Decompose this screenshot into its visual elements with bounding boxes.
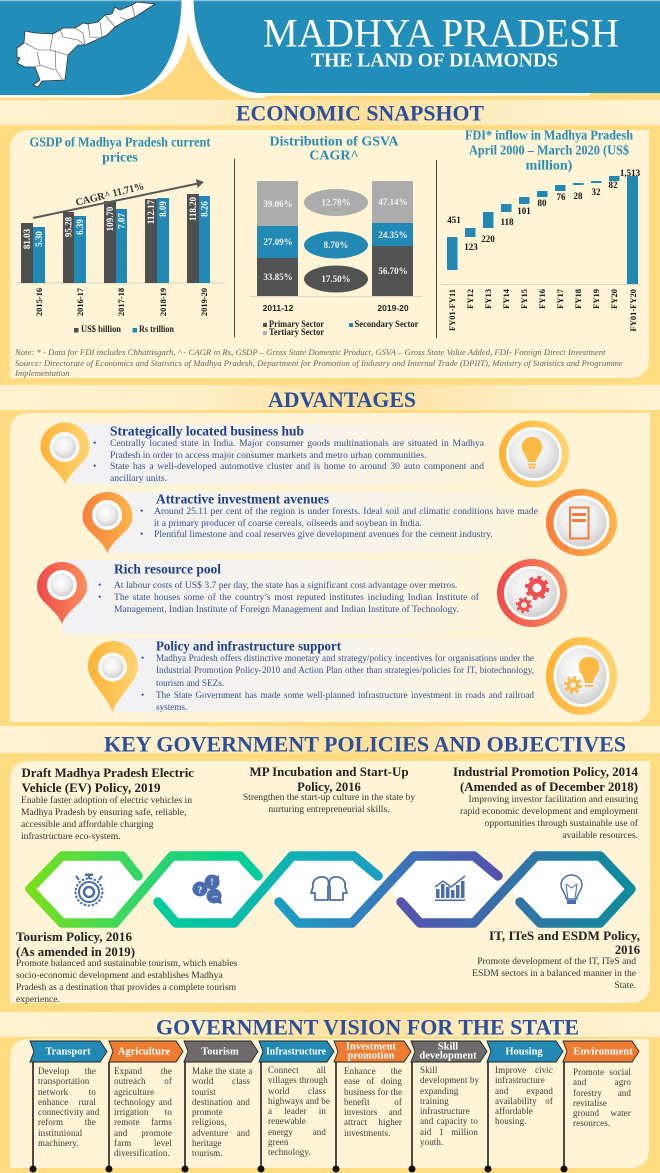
text block: environment: Promote social bbox=[573, 1067, 631, 1077]
heading: Attractive investment avenues bbox=[156, 492, 329, 506]
text block: housing: housing. bbox=[495, 1116, 527, 1126]
chart: FDI waterfall: 28 bbox=[574, 191, 583, 201]
section band: key government policies: KEY GOVERNMENT POLICIES AND OBJECTIVES bbox=[104, 732, 626, 756]
policy heading: industrial promotion: (Amended as of December 2018) bbox=[460, 780, 638, 794]
chart: GSVA distribution: 39.06% bbox=[263, 199, 293, 209]
chart title: million) bbox=[526, 158, 573, 174]
chart: GSVA distribution: 33.85% bbox=[263, 272, 293, 282]
panel: economic snapshot bbox=[10, 128, 649, 378]
icon: pin bbox=[82, 492, 133, 553]
policy heading: draft EV: Vehicle (EV) Policy, 2019 bbox=[22, 781, 160, 795]
text block: investment avenues bullets: Around 25.11 per cent of the region is under forests. Ideal soil and climatic conditions have made bbox=[154, 506, 538, 517]
text block: skill development: youth. bbox=[420, 1137, 443, 1147]
chart title bbox=[30, 136, 211, 166]
chart: GSDP bars: 109.70 bbox=[105, 206, 115, 231]
text block: agriculture: technology and bbox=[114, 1097, 172, 1107]
chart: GSDP bars: 2019-20 bbox=[199, 288, 209, 316]
text block: agriculture: farm level bbox=[114, 1138, 172, 1148]
text block: agriculture: agriculture bbox=[114, 1087, 154, 1097]
policy heading: tourism bbox=[16, 930, 135, 959]
text block: environment bbox=[573, 1067, 631, 1128]
text block: transport: Develop the bbox=[38, 1066, 96, 1076]
text block: transport: machinery. bbox=[38, 1138, 79, 1148]
chart: FDI waterfall: FY12 bbox=[465, 289, 475, 309]
policy heading: incubation: Policy, 2016 bbox=[297, 780, 361, 794]
note and source text: Implementation bbox=[15, 368, 70, 378]
text: • bbox=[140, 529, 143, 540]
arrow: CAGR trend bbox=[33, 179, 204, 218]
chart: FDI waterfall: FY16 bbox=[537, 289, 547, 309]
hexagon chain bbox=[30, 856, 631, 923]
text block: industrial promotion policy: opportunities through sustainable use of bbox=[485, 818, 638, 829]
note and source text bbox=[15, 347, 623, 378]
policy heading: industrial promotion bbox=[453, 765, 639, 794]
chart: FDI waterfall bbox=[442, 128, 641, 332]
chart: GSVA distribution: 56.70% bbox=[378, 266, 408, 276]
text block: agriculture: and promote bbox=[114, 1128, 172, 1138]
policy heading: IT: 2016 bbox=[615, 943, 640, 957]
text block: resource pool bullets bbox=[98, 580, 479, 615]
section band: government vision bbox=[0, 1012, 660, 1040]
icon: speech bubbles: ? bbox=[198, 885, 202, 895]
text block: investment avenues bullets: Plentiful limestone and coal reserves give development avenues for the cement industry. bbox=[154, 529, 493, 540]
icon: light bulb bbox=[561, 875, 582, 904]
chart: FDI waterfall: FY17 bbox=[555, 288, 565, 309]
text block: infrastructure: technology. bbox=[268, 1147, 311, 1157]
heading: Rich resource pool bbox=[114, 562, 221, 576]
chart: FDI waterfall: 82 bbox=[608, 180, 618, 190]
chart: GSDP bars: 5.30 bbox=[34, 231, 44, 247]
policy heading: IT bbox=[489, 929, 640, 957]
text block: transport: network to bbox=[38, 1087, 96, 1097]
policy heading: tourism: Tourism Policy, 2016 bbox=[16, 930, 132, 944]
text block: investment promotion bbox=[344, 1066, 402, 1138]
text block: tourism policy: socio-economic development and establishes Madhya bbox=[16, 970, 223, 981]
text block: environment: ground water bbox=[573, 1108, 631, 1118]
note and source text: Source: Directorate of Economics and Statistics of Madhya Pradesh, Department for Promotion of Industry and Internal Trade (DPIIT), Ministry of Statistics and Programme bbox=[15, 358, 623, 368]
text block: business hub bullets: ancillary units. bbox=[110, 473, 167, 484]
chart: FDI waterfall: 32 bbox=[592, 187, 601, 197]
text block: resource pool bullets: The state houses some of the country’s most reputed institutes including Indian Institute of bbox=[114, 592, 479, 603]
chart: FDI waterfall: FY14 bbox=[501, 288, 511, 309]
text block: transport: connectivity and bbox=[38, 1107, 99, 1117]
text block: skill development: aid 1 million bbox=[420, 1127, 478, 1137]
icon: growth chart bbox=[435, 876, 465, 901]
chart: GSVA distribution: 17.50% bbox=[321, 274, 351, 284]
chart: FDI waterfall: FY20 bbox=[609, 289, 619, 309]
text block: housing: infrastructure bbox=[495, 1075, 545, 1085]
chart title: Distribution of GSVA bbox=[270, 134, 399, 150]
text: • bbox=[93, 461, 96, 472]
text block: EV policy: Madhya Pradesh by ensuring safe, reliable, bbox=[21, 807, 186, 818]
text block: business hub bullets: Pradesh in order to access major consumer markets and metro urban communities. bbox=[110, 450, 427, 461]
chart: GSDP bars: 95.28 bbox=[64, 216, 74, 237]
chart: FDI waterfall: 76 bbox=[556, 192, 566, 202]
row: policy and infrastructure support bbox=[88, 637, 617, 715]
text block: policy support bullets: systems. bbox=[156, 702, 187, 712]
text block: policy support bullets: Industrial Promotion Policy-2010 and Action Plan other than strategies/policies for IT, biotechnology, bbox=[156, 665, 534, 675]
text block: policy support bullets: The State Government has made some well-planned infrastructure investment in roads and railroad bbox=[156, 690, 534, 700]
chart: GSDP bars bbox=[15, 136, 225, 335]
chart title bbox=[270, 134, 399, 164]
chart: GSVA distribution: 12.78% bbox=[321, 198, 351, 208]
text: • bbox=[141, 690, 144, 700]
icon: pin bbox=[40, 422, 90, 484]
text block: environment: forestry and bbox=[573, 1088, 631, 1098]
panel: header right blue bbox=[194, 0, 660, 93]
chart: GSDP bars: 8.09 bbox=[158, 201, 168, 217]
row: rich resource pool bbox=[37, 559, 567, 634]
policy heading: draft EV bbox=[22, 766, 194, 795]
chart: GSDP bars: 8.26 bbox=[200, 201, 210, 217]
text block: tourism: Make the state a bbox=[192, 1066, 252, 1076]
chevron: environment: Environment bbox=[573, 1046, 633, 1058]
chart title: prices bbox=[102, 150, 138, 166]
text block: transport: reform the bbox=[38, 1117, 96, 1127]
text block: agriculture: remote farms bbox=[114, 1117, 172, 1127]
chart: GSDP bars: 2016-17 bbox=[75, 287, 85, 316]
text block: incubation policy bbox=[243, 792, 416, 815]
icon: bulb and gear badge bbox=[546, 637, 617, 715]
text block: EV policy: Enable faster adoption of electric vehicles in bbox=[21, 795, 192, 806]
text block: tourism: adventure and bbox=[192, 1128, 250, 1138]
chevron: environment bbox=[563, 1041, 639, 1062]
text block: investment promotion: attract higher bbox=[344, 1117, 402, 1127]
text block: agriculture: irrigation to bbox=[114, 1107, 172, 1117]
text block: investment promotion: benefit of bbox=[344, 1097, 402, 1107]
text block: infrastructure: villages through bbox=[268, 1075, 328, 1085]
text block: policy support bullets bbox=[141, 653, 534, 712]
chevron: transport: Transport bbox=[45, 1046, 91, 1058]
text block: tourism policy: experience. bbox=[16, 994, 60, 1005]
text block: housing: affordable bbox=[495, 1106, 533, 1116]
text block: housing bbox=[495, 1065, 553, 1126]
section band: key government policies bbox=[0, 726, 660, 756]
chevron: skill development: development bbox=[419, 1050, 477, 1062]
chevron: agriculture: Agriculture bbox=[118, 1046, 170, 1058]
text block: industrial promotion policy: available resources. bbox=[562, 830, 638, 841]
text block: environment: and agro bbox=[573, 1077, 631, 1087]
chart: GSVA distribution: 24.35% bbox=[378, 230, 408, 240]
text block: incubation policy: Strengthen the start-up culture in the state by bbox=[243, 792, 415, 803]
text block: EV policy: infrastructure eco-system. bbox=[21, 831, 121, 842]
text block: investment promotion: investments. bbox=[344, 1128, 390, 1138]
heading: Strategically located business hub bbox=[110, 424, 304, 438]
text block: environment: resources. bbox=[573, 1118, 610, 1128]
section band: advantages: ADVANTAGES bbox=[268, 387, 416, 412]
row: strategically located business hub bbox=[40, 420, 569, 488]
policy heading: IT: IT, ITeS and ESDM Policy, bbox=[489, 929, 640, 943]
text block: housing: Improve civic bbox=[495, 1065, 553, 1075]
text block: skill development bbox=[420, 1065, 479, 1147]
text block: business hub bullets bbox=[93, 438, 484, 484]
arrow: CAGR trend: CAGR^ 11.71% bbox=[75, 181, 145, 209]
chart: GSDP bars: 2015-16 bbox=[34, 288, 44, 316]
legend: Tertiary Sector bbox=[269, 328, 325, 338]
chart: FDI waterfall: 80 bbox=[538, 198, 547, 208]
chart: GSVA distribution: 2019-20 bbox=[377, 303, 409, 313]
section band: economic snapshot: ECONOMIC SNAPSHOT bbox=[236, 100, 484, 126]
text block: IT policy: State. bbox=[614, 980, 636, 991]
text block: skill development: training bbox=[420, 1096, 449, 1106]
text block: resource pool bullets: At labour costs of US$ 3.7 per day, the state has a significant cost advantage over metros. bbox=[114, 580, 457, 591]
panel: government vision bbox=[10, 1039, 649, 1172]
chevron: skill development bbox=[411, 1041, 487, 1062]
chevron: tourism: Tourism bbox=[201, 1046, 239, 1058]
text block: environment: revitalise bbox=[573, 1098, 607, 1108]
text block: housing: and expand bbox=[495, 1086, 553, 1096]
text: • bbox=[140, 506, 143, 517]
legend bbox=[263, 320, 419, 338]
text block: business hub bullets: Centrally located state in India. Major consumer goods multinationals are situated in Madhya bbox=[110, 438, 484, 449]
chevron: infrastructure bbox=[259, 1041, 334, 1062]
text block: skill development: Skill bbox=[420, 1065, 438, 1075]
text block: tourism policy: Pradesh as a destination that provides a complete tourism bbox=[16, 982, 236, 993]
chart: GSDP bars: 7.07 bbox=[116, 213, 126, 229]
chart: GSVA distribution: 8.70% bbox=[324, 240, 348, 250]
text block: skill development: expanding bbox=[420, 1086, 458, 1096]
icon: gears badge bbox=[497, 559, 567, 627]
chart: FDI waterfall: FY18 bbox=[573, 289, 583, 309]
text block: policy support bullets: tourism and SEZs. bbox=[156, 678, 224, 688]
text block: skill development: development by bbox=[420, 1075, 479, 1085]
chart: GSVA distribution: 27.09% bbox=[263, 237, 293, 247]
text block: investment promotion: ease of doing bbox=[344, 1076, 402, 1086]
chart: GSDP bars: 2018-19 bbox=[158, 288, 168, 316]
note and source text: Note: * - Data for FDI includes Chhattisgarh, ^ - CAGR in Rs, GSDP – Gross State Domestic Product, GSVA – Gross State Value Added, FDI- Foreign Direct Investment bbox=[15, 347, 605, 357]
text: • bbox=[141, 653, 144, 663]
text block: tourism policy bbox=[16, 958, 237, 1005]
legend: US$ billion bbox=[81, 324, 122, 335]
chevron: investment promotion: promotion bbox=[347, 1050, 395, 1062]
chart: GSDP bars: 118.20 bbox=[188, 196, 198, 221]
chart title bbox=[465, 128, 633, 174]
chart: GSVA distribution bbox=[250, 134, 422, 338]
text block: agriculture: outreach of bbox=[114, 1076, 172, 1086]
icon: light bulb badge bbox=[499, 420, 569, 488]
text block: tourism: tourist bbox=[192, 1087, 216, 1097]
text: • bbox=[98, 592, 101, 603]
text block: transport: institutional bbox=[38, 1128, 82, 1138]
icon: two heads bbox=[311, 877, 347, 900]
text block: policy support bullets: Madhya Pradesh offers distinctive monetary and strategy/policy incentives for organisations under the bbox=[156, 653, 534, 663]
text block: IT policy bbox=[472, 956, 636, 991]
icon: speech bubbles: ! bbox=[210, 877, 214, 887]
header banner bbox=[0, 0, 660, 100]
chevron: investment promotion bbox=[334, 1041, 411, 1062]
text block: infrastructure: renewable bbox=[268, 1116, 306, 1126]
text block: tourism bbox=[192, 1066, 252, 1158]
chart: GSDP bars: 112.17 bbox=[146, 199, 156, 224]
text block: incubation policy: nurturing entrepreneurial skills. bbox=[268, 804, 390, 815]
chart: FDI waterfall: 1,513 bbox=[620, 168, 641, 178]
chart: FDI waterfall: 123 bbox=[464, 242, 478, 252]
chart title: April 2000 – March 2020 (US$ bbox=[469, 144, 629, 158]
chart: FDI waterfall: FY01-FY11 bbox=[447, 289, 457, 331]
policy heading: draft EV: Draft Madhya Pradesh Electric bbox=[22, 766, 194, 780]
text block: infrastructure: highways and be bbox=[268, 1096, 330, 1106]
chart: GSDP bars: 6.39 bbox=[75, 219, 85, 235]
text block: investment promotion: business for the bbox=[344, 1087, 402, 1097]
chart title: GSDP of Madhya Pradesh current bbox=[30, 136, 211, 150]
heading: Policy and infrastructure support bbox=[156, 638, 342, 654]
chart: GSDP bars: 2017-18 bbox=[116, 288, 126, 316]
text block: skill development: and capacity to bbox=[420, 1116, 478, 1126]
text block: infrastructure: green bbox=[268, 1137, 288, 1147]
text block: tourism: heritage bbox=[192, 1138, 222, 1148]
chevron: agriculture bbox=[109, 1041, 183, 1062]
text block: transport: enhance rural bbox=[38, 1097, 96, 1107]
text: • bbox=[98, 580, 101, 591]
section band: advantages bbox=[0, 385, 660, 412]
section band: government vision: GOVERNMENT VISION FOR THE STATE bbox=[156, 1014, 579, 1040]
panel: key government policies bbox=[10, 761, 650, 1003]
legend bbox=[74, 324, 175, 335]
chart: GSVA distribution: 2011-12 bbox=[263, 303, 294, 313]
text block: tourism: world class bbox=[192, 1076, 250, 1086]
chart title: CAGR^ bbox=[309, 148, 359, 164]
text block: infrastructure: world class bbox=[268, 1086, 326, 1096]
chevron: transport bbox=[30, 1041, 107, 1062]
chevron: investment promotion: Investment bbox=[346, 1042, 397, 1052]
text block: agriculture: diversification. bbox=[114, 1148, 170, 1158]
text block: housing: availability of bbox=[495, 1096, 553, 1106]
title: MADHYA PRADESH bbox=[263, 10, 619, 56]
text block: tourism: tourism. bbox=[192, 1148, 223, 1158]
policy heading: incubation bbox=[250, 765, 408, 794]
text block: agriculture: Expand the bbox=[114, 1066, 172, 1076]
policy heading: industrial promotion: Industrial Promotion Policy, 2014 bbox=[453, 765, 639, 779]
chart: FDI waterfall: 220 bbox=[481, 234, 495, 244]
text block: infrastructure: Connect all bbox=[268, 1065, 326, 1075]
text block: investment promotion: investors and bbox=[344, 1107, 402, 1117]
chart: FDI waterfall: FY19 bbox=[591, 289, 601, 309]
text block: agriculture bbox=[114, 1066, 172, 1158]
text block: tourism policy: Promote balanced and sustainable tourism, which enables bbox=[16, 958, 237, 969]
text block: tourism: religious, bbox=[192, 1117, 227, 1127]
chevron: housing bbox=[487, 1041, 563, 1062]
text block: transport bbox=[38, 1066, 100, 1148]
chart: GSVA distribution: 47.14% bbox=[378, 197, 408, 207]
text block: infrastructure bbox=[268, 1065, 330, 1157]
panel: advantages bbox=[10, 413, 650, 722]
text block: EV policy bbox=[21, 795, 192, 842]
icon: state map bbox=[17, 2, 155, 87]
chart: FDI waterfall: FY13 bbox=[483, 289, 493, 309]
panel: header left blue bbox=[0, 0, 182, 95]
chevron: skill development: Skill bbox=[438, 1042, 458, 1052]
text block: business hub bullets: State has a well-developed automotive cluster and is home to around 30 auto component and bbox=[110, 461, 484, 472]
legend: Primary Sector bbox=[269, 320, 325, 330]
text block: resource pool bullets: Management, Indian Institute of Foreign Management and Indian Institute of Technology. bbox=[114, 604, 459, 615]
chart: FDI waterfall: FY01-FY20 bbox=[628, 289, 638, 332]
text block: IT policy: ESDM sectors in a balanced manner in the bbox=[472, 968, 636, 979]
chart: FDI waterfall: FY15 bbox=[519, 289, 529, 309]
chart: FDI waterfall: 451 bbox=[447, 215, 461, 225]
text block: infrastructure: a leader in bbox=[268, 1106, 326, 1116]
text block: industrial promotion policy: Improving investor facilitation and ensuring bbox=[469, 794, 638, 805]
icon: stopwatch bbox=[76, 874, 102, 906]
text block: skill development: infrastructure bbox=[420, 1106, 470, 1116]
section band: economic snapshot bbox=[0, 100, 660, 126]
text block: investment avenues bullets: it a primary producer of coarse cereals, oilseeds and soybean in India. bbox=[154, 518, 422, 529]
chart: GSDP bars: 81.03 bbox=[22, 228, 32, 249]
text block: EV policy: accessible and affordable charging bbox=[21, 819, 154, 830]
icon: speech bubbles bbox=[192, 874, 222, 904]
subtitle: THE LAND OF DIAMONDS bbox=[311, 50, 558, 72]
chevron: tourism bbox=[184, 1041, 258, 1062]
text block: transport: transportation bbox=[38, 1076, 89, 1086]
text: • bbox=[93, 438, 96, 449]
chart: FDI waterfall: 101 bbox=[517, 206, 531, 216]
icon: speech bubbles: ... bbox=[212, 890, 218, 900]
chart: FDI waterfall: 118 bbox=[500, 217, 514, 227]
icon: pin bbox=[37, 562, 87, 624]
row: attractive investment avenues bbox=[82, 489, 617, 556]
legend: Secondary Sector bbox=[354, 320, 419, 330]
chevron: housing: Housing bbox=[505, 1046, 543, 1058]
text block: industrial promotion policy: rapid economic development and employment bbox=[460, 806, 638, 817]
text block: tourism: destination and bbox=[192, 1097, 250, 1107]
legend: Rs trillion bbox=[139, 325, 175, 335]
text block: industrial promotion policy bbox=[460, 794, 638, 841]
icon: phone badge bbox=[546, 489, 617, 556]
chevron: infrastructure: Infrastructure bbox=[266, 1046, 326, 1058]
icon: pin bbox=[88, 641, 138, 712]
text block: tourism: promote bbox=[192, 1107, 223, 1117]
text block: IT policy: Promote development of the IT, ITeS and bbox=[477, 956, 636, 967]
chart title: FDI* inflow in Madhya Pradesh bbox=[465, 128, 633, 144]
text block: infrastructure: energy and bbox=[268, 1127, 326, 1137]
policy heading: tourism: (As amended in 2019) bbox=[16, 945, 135, 959]
text block: investment avenues bullets bbox=[140, 506, 538, 540]
policy heading: incubation: MP Incubation and Start-Up bbox=[250, 765, 408, 779]
text block: investment promotion: Enhance the bbox=[344, 1066, 402, 1076]
